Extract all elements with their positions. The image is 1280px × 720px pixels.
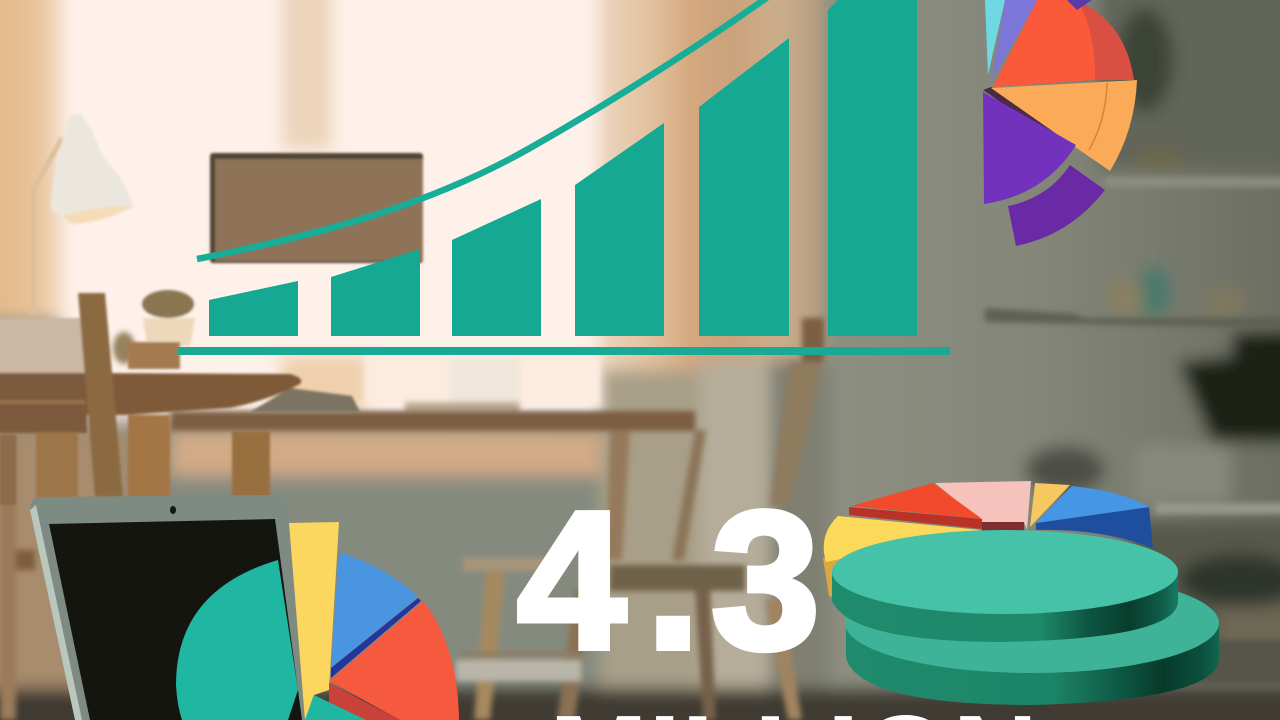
laptop — [30, 495, 312, 720]
upper disc — [832, 530, 1178, 642]
orange slice — [1030, 483, 1070, 527]
long desk — [170, 411, 695, 431]
chair back — [78, 293, 123, 497]
side cabinet — [0, 318, 85, 374]
bar 6 — [828, 0, 917, 336]
bar 3 — [452, 199, 541, 336]
stool — [463, 558, 563, 571]
plant pot — [143, 318, 195, 346]
slice: teal — [176, 560, 298, 720]
laptop frame — [30, 495, 312, 720]
lower disc — [845, 573, 1219, 705]
bar 4 — [575, 123, 664, 336]
monitor — [210, 153, 423, 263]
slice: small teal — [305, 695, 366, 720]
trend curve — [197, 0, 772, 259]
lamp — [33, 113, 134, 315]
bar chart — [209, 0, 917, 336]
chart baseline — [178, 347, 950, 355]
bottom left pie chart — [176, 522, 459, 720]
yellow slice — [824, 516, 981, 562]
slice: dark red side — [329, 683, 400, 720]
dark blue side — [1036, 507, 1153, 548]
maroon side — [982, 522, 1024, 531]
blue slice — [1036, 486, 1149, 523]
bar 2 — [331, 249, 420, 336]
3D pie chart — [823, 481, 1219, 705]
yellow side — [823, 550, 868, 600]
bar 5 — [699, 38, 789, 336]
bar 1 — [209, 281, 298, 336]
book — [250, 388, 360, 412]
chair back posts — [802, 318, 824, 362]
laptop screen — [49, 519, 302, 720]
slice: yellow — [289, 522, 339, 720]
right wall lower — [1130, 520, 1280, 690]
pink slice — [935, 481, 1031, 530]
red slice — [851, 483, 982, 519]
slice: red — [329, 601, 459, 720]
webcam — [170, 506, 176, 514]
slice: dark blue sliver — [331, 598, 421, 678]
round table — [85, 373, 301, 415]
dark red side — [849, 507, 982, 529]
top right pie chart — [983, 0, 1137, 246]
table legs — [36, 432, 78, 498]
desk under-window white — [365, 355, 600, 405]
slice: blue — [331, 552, 418, 668]
headline number: 4.3 — [517, 471, 820, 690]
